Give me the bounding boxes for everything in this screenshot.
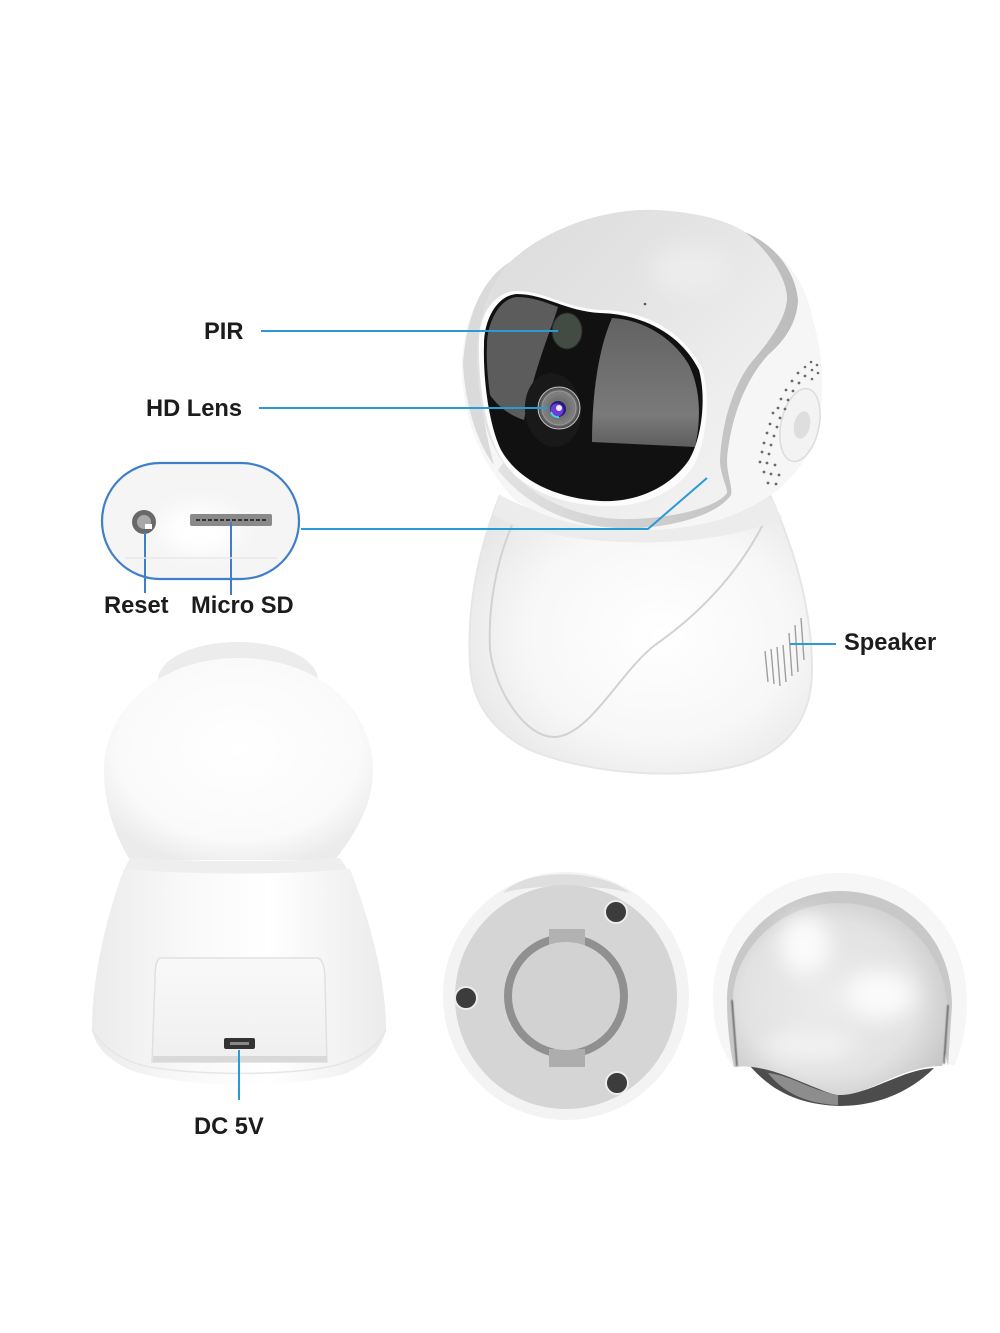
rear base rim xyxy=(92,1030,386,1073)
inset panel: reset and micro SD xyxy=(102,463,299,595)
rear top cap xyxy=(158,642,318,718)
dome dark underside xyxy=(750,1066,934,1106)
main camera: front view xyxy=(462,210,826,774)
mount base disc xyxy=(443,872,689,1120)
mount screw holes xyxy=(455,901,628,1094)
label: Micro SD: Micro SD xyxy=(191,593,294,619)
button inner disc xyxy=(791,410,813,440)
micro SD slot xyxy=(190,514,272,595)
microphone hole xyxy=(644,303,646,305)
label: DC 5V: DC 5V xyxy=(194,1114,264,1140)
panel highlight xyxy=(160,506,240,554)
rear base xyxy=(92,869,386,1085)
right side button xyxy=(774,385,826,465)
white visor rim xyxy=(479,291,707,506)
reset button xyxy=(132,510,156,593)
head front plate xyxy=(475,210,787,519)
callout connector: ports inset to camera xyxy=(301,478,707,529)
rear neck ring xyxy=(124,858,348,874)
camera base xyxy=(469,495,812,774)
rear view camera xyxy=(92,642,386,1100)
flap shadow xyxy=(153,1056,327,1062)
visor right reflection xyxy=(592,318,699,447)
micro USB port xyxy=(224,1038,255,1049)
callout: HD Lens: HD Lens xyxy=(146,396,242,422)
label: Reset: Reset xyxy=(104,593,169,619)
mount ring xyxy=(504,929,628,1067)
dome ball xyxy=(733,903,948,1095)
HD lens xyxy=(521,370,585,450)
left silver trim xyxy=(463,262,510,465)
plate highlight xyxy=(650,245,730,295)
bracket inner band xyxy=(727,891,952,1067)
dome highlights xyxy=(765,915,915,1060)
callout: Speaker: Speaker xyxy=(844,630,936,656)
speaker grille xyxy=(765,618,804,686)
PIR sensor xyxy=(552,313,582,349)
disc outer rim xyxy=(443,872,689,1120)
bracket shell xyxy=(713,873,967,1067)
DC line xyxy=(238,1050,240,1100)
disc face xyxy=(455,885,677,1109)
callout: PIR: PIR xyxy=(204,319,244,345)
speaker holes on side xyxy=(759,361,819,485)
bracket view dome xyxy=(713,873,967,1106)
silver trim band xyxy=(498,232,798,528)
rear port flap xyxy=(152,958,327,1062)
camera head shell xyxy=(462,210,822,530)
disc top lip xyxy=(503,874,630,893)
dome edge shadow xyxy=(732,1000,948,1066)
visor left reflection xyxy=(487,297,558,420)
rear ball head xyxy=(104,658,373,860)
dark visor xyxy=(484,294,703,501)
